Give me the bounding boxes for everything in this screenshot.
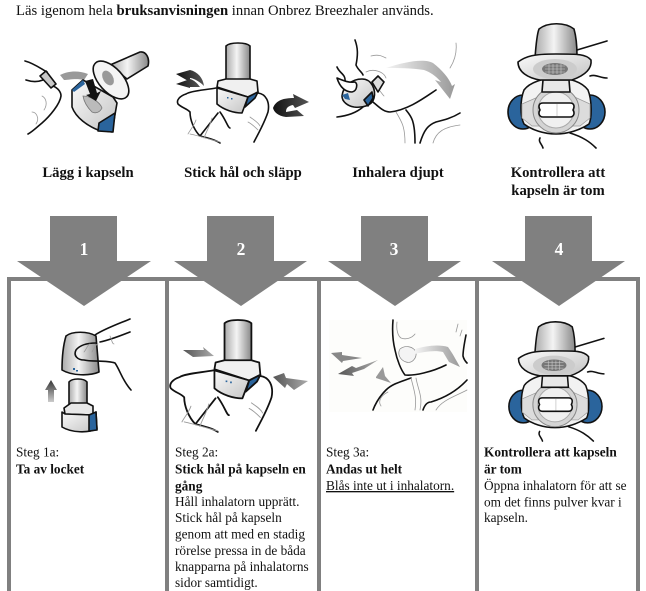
label: Kontrollera att kapseln är tom: Kontrollera att <box>511 165 605 181</box>
text: step 1a: Ta av locket <box>16 462 85 476</box>
illustration: pierce capsule <box>170 320 308 432</box>
text: check capsule: Kontrollera att kapseln <box>484 444 617 460</box>
illustration: inhale deeply <box>337 40 460 143</box>
text: check capsule: kapseln. <box>484 510 528 525</box>
illustration: insert capsule <box>25 52 149 134</box>
text: step 2a: Steg 2a: <box>175 444 218 460</box>
arrow 4 <box>492 216 625 306</box>
arrow 3 <box>328 216 461 306</box>
text: step 2a: knapparna på inhalatorns <box>175 559 309 574</box>
panel frame <box>7 277 640 591</box>
label: Kontrollera att kapseln är tom <box>511 165 605 199</box>
text: step 2a: genom att med en stadig <box>175 526 305 542</box>
text: check capsule: om det finns pulver kvar i <box>484 494 622 510</box>
arrow 1: 1 <box>80 239 88 259</box>
text: step 2a: Stick hål på kapseln <box>175 510 282 525</box>
illustration: check capsule close-up <box>509 322 604 441</box>
text: step 2a: sidor samtidigt. <box>175 575 258 590</box>
text: step 2a: Håll inhalatorn upprätt. <box>175 494 299 509</box>
text: step 3a: Steg 3a: <box>326 444 369 460</box>
text: step 2a: Stick hål på kapseln en <box>175 462 306 476</box>
label: Lägg i kapseln: Lägg i kapseln <box>42 165 134 181</box>
text: check capsule: är tom <box>484 462 522 476</box>
illustration: check capsule <box>508 24 607 148</box>
arrow 2 <box>174 216 307 306</box>
text: step 1a: Steg 1a: <box>16 444 59 460</box>
label: Kontrollera att kapseln är tom: kapseln är tom <box>511 183 605 199</box>
illustration: pierce and release <box>176 43 309 143</box>
text: step 3a: Andas ut helt <box>326 462 403 476</box>
intro text: Läs igenom hela bruksanvisningen innan Onbrez Breezhaler används. <box>16 3 434 19</box>
label: Stick hål och släpp: Stick hål och släpp <box>184 165 302 181</box>
text: check capsule: Öppna inhalatorn för att se <box>484 478 627 493</box>
text: step 2a: rörelse pressa in de båda <box>175 543 306 558</box>
arrow 2: 2 <box>237 239 245 259</box>
text: check capsule <box>484 444 627 525</box>
text: step 3a <box>326 444 454 493</box>
arrow 4: 4 <box>555 239 564 259</box>
label: Inhalera djupt: Inhalera djupt <box>352 165 444 181</box>
illustration: remove cap <box>45 319 131 432</box>
arrow 1 <box>17 216 151 306</box>
text: step 1a <box>16 444 85 476</box>
text: step 2a: gång <box>175 478 203 494</box>
arrow 3: 3 <box>390 239 399 259</box>
text: step 3a: Blås inte ut i inhalatorn. <box>326 478 454 493</box>
illustration: breathe out <box>329 320 467 412</box>
text: step 2a <box>175 444 309 590</box>
